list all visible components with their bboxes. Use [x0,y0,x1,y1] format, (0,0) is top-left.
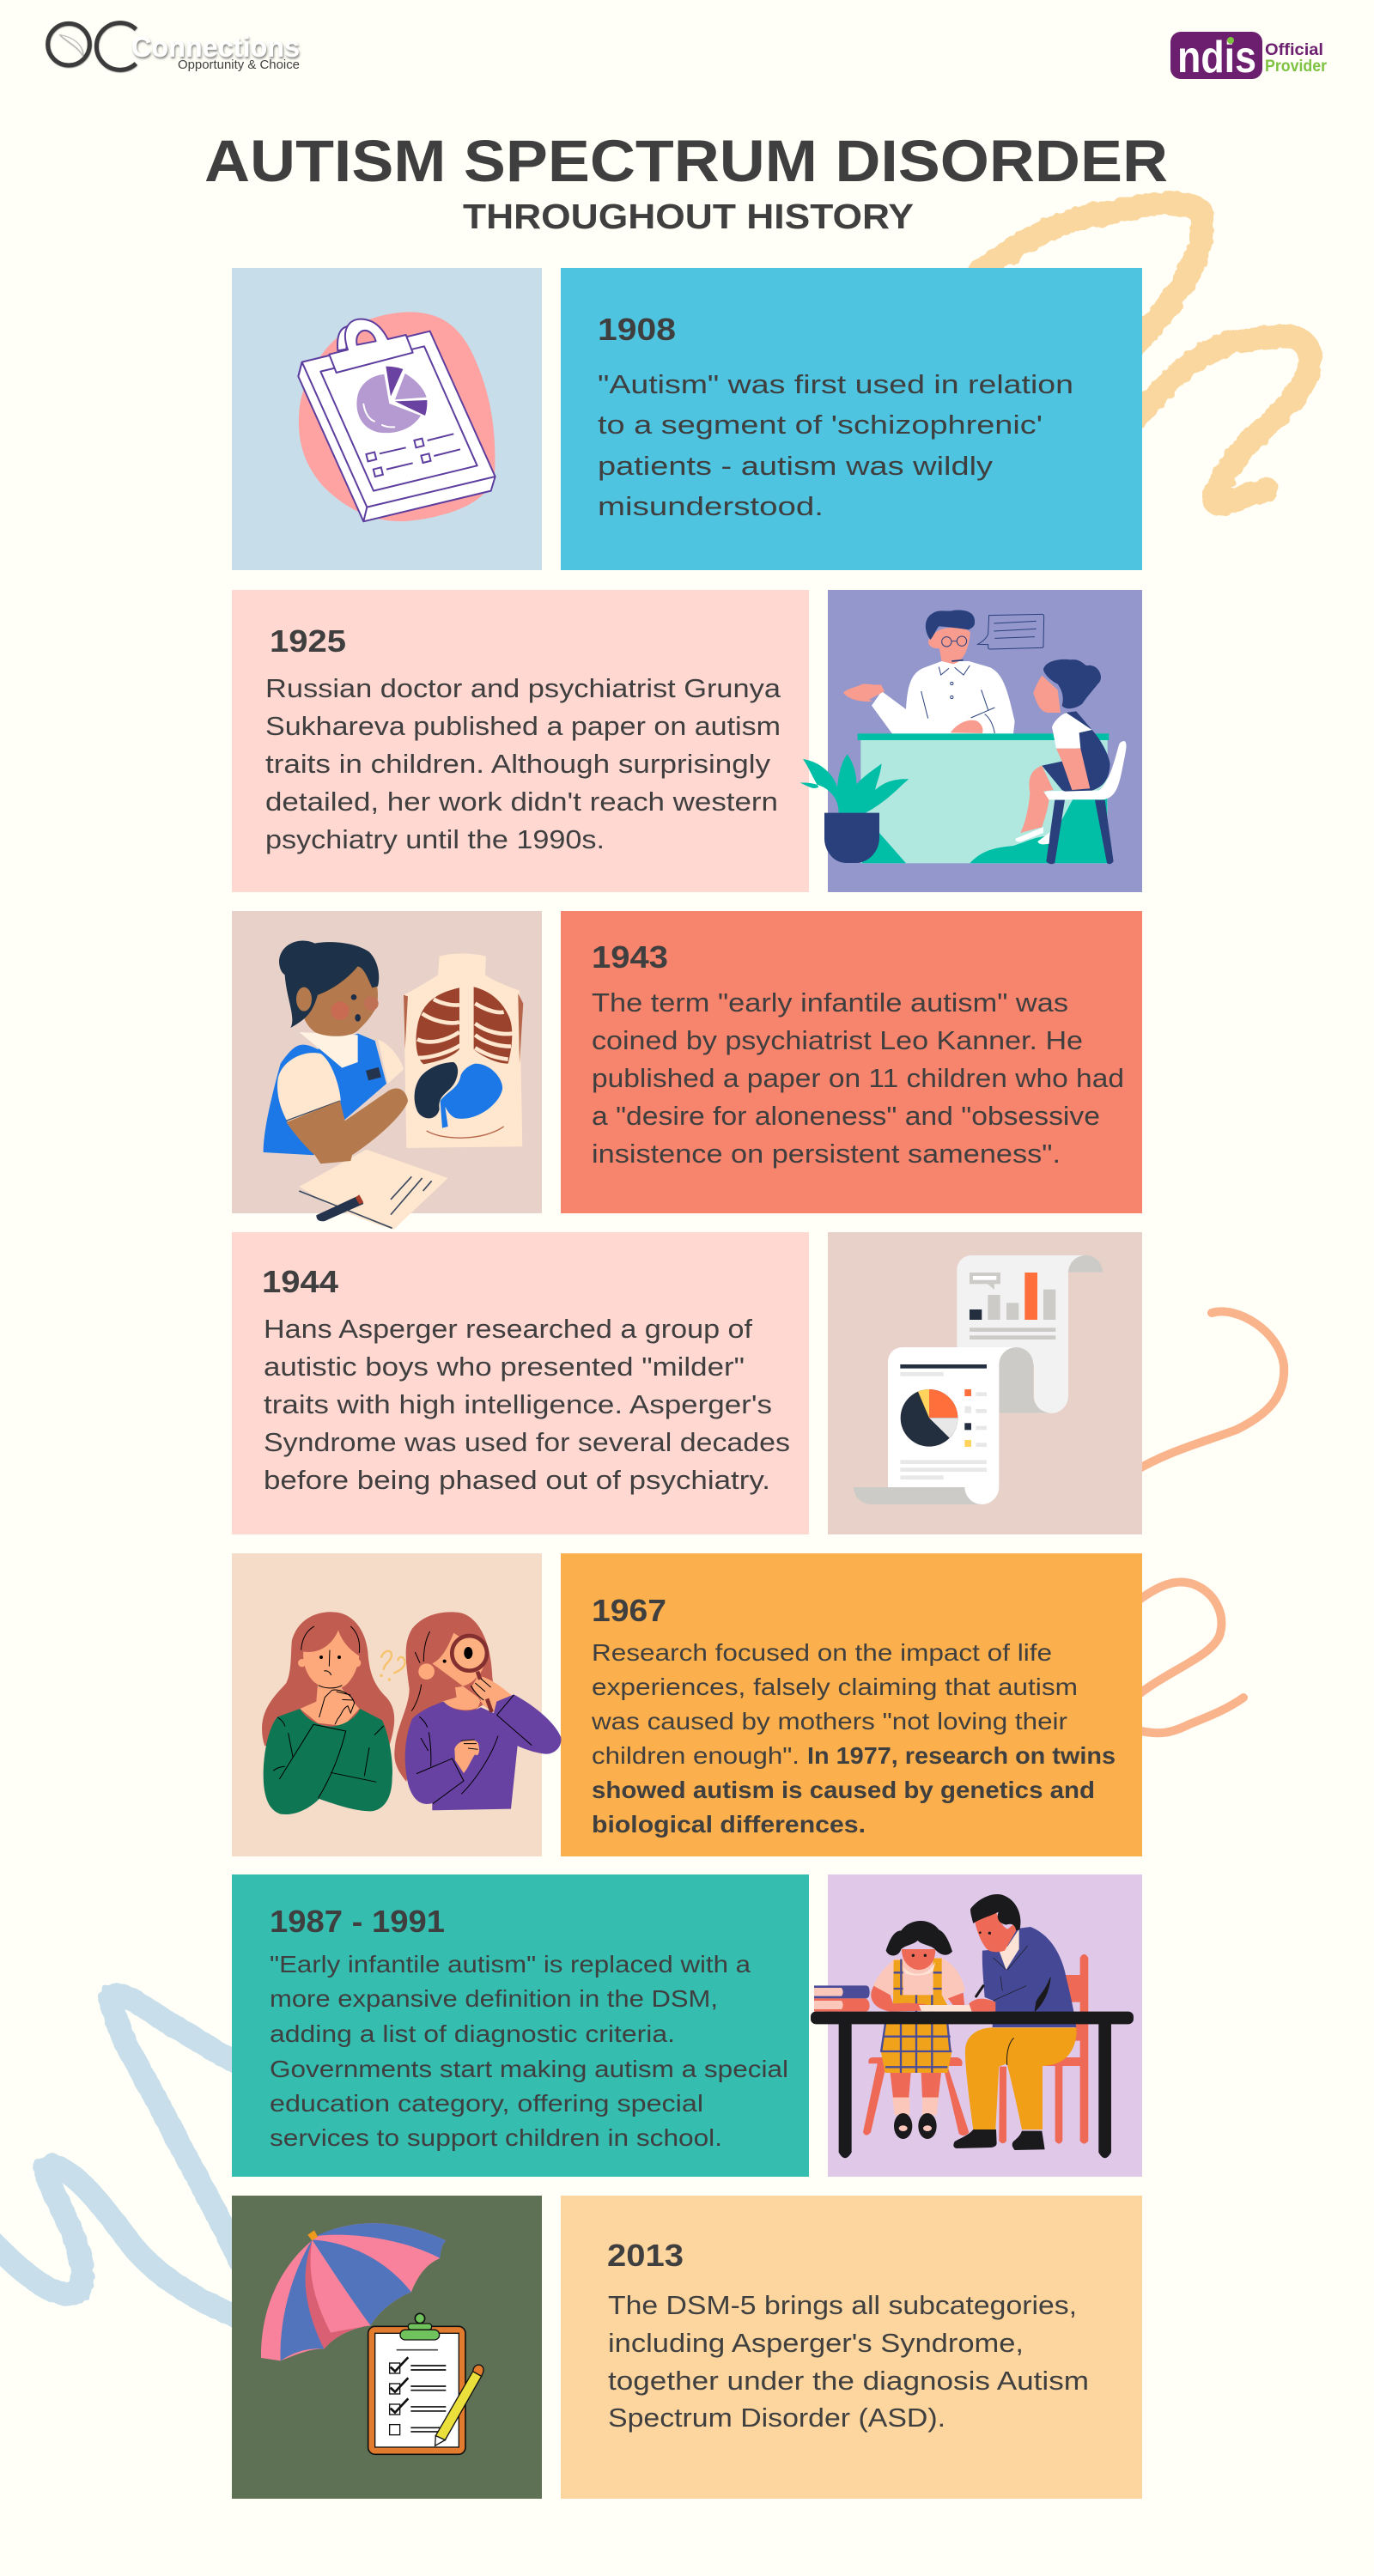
panel: 1943 text: published a paper on 11 children who had [592,1063,1124,1093]
panel: 1908 image [232,268,542,570]
logo: NDIS official provider: Official [1265,41,1323,59]
panel: 1943 text: The term "early infantile autism" was [592,987,1068,1018]
panel: 1944 text: autistic boys who presented "milder" [264,1352,745,1382]
illustration: report documents [854,1255,1103,1504]
logo: Connections [48,23,300,72]
panel: 1943 text: 1943 [592,939,668,975]
panel: 1944 text: traits with high intelligence. Asperger's [264,1389,772,1419]
panel: 2013 text: together under the diagnosis Autism [608,2366,1089,2396]
plant [800,754,909,814]
panel: 1967 text: In 1977, research on twins [807,1742,1116,1769]
decorative squiggle: orange top right [970,204,1310,504]
panel: 1943 text: a "desire for aloneness" and "obsessive [592,1101,1100,1131]
panel: 1925 text: Sukhareva published a paper on autism [265,711,781,741]
logo: NDIS official provider [1170,32,1328,82]
panel: 1943 image [232,911,542,1230]
illustration: teacher and girl at table [811,1894,1134,2158]
panel: 1967 text: was caused by mothers "not loving their [591,1708,1067,1735]
panel: 1943 text: insistence on persistent sameness". [592,1139,1061,1169]
panel: 1944 text [232,1232,809,1534]
illustration: doctor and child at desk [800,611,1126,864]
panel: 2013 text: including Asperger's Syndrome, [608,2328,1024,2358]
panel: 1943 text [561,911,1142,1213]
panel: 1987-1991 text [232,1874,809,2177]
panel: 1908 text: "Autism" was first used in relation [598,369,1073,399]
panel: 1987-1991 text: services to support children in school. [270,2124,722,2151]
panel: 1987-1991 text: education category, offering special [270,2090,703,2117]
logo: NDIS official provider: Provider [1265,58,1328,76]
panel: 1908 text: misunderstood. [598,491,824,521]
panel: 1987-1991 text: 1987 - 1991 [270,1904,445,1939]
illustration: umbrella and checklist clipboard [261,2223,483,2454]
panel: 1944 text: Syndrome was used for several decades [264,1427,790,1457]
panel: 1908 text [561,268,1142,570]
illustration: woman with anatomy model [264,940,523,1230]
panel: 2013 text: Spectrum Disorder (ASD). [608,2403,945,2433]
panel: 1987-1991 text: more expansive definition in the DSM, [270,1985,718,2012]
panel: 1908 text: to a segment of 'schizophrenic' [598,410,1043,440]
panel: 1908 text: 1908 [598,312,676,347]
panel: 1987-1991 image [828,1874,1142,2177]
panel: 1944 text: 1944 [262,1264,338,1299]
panel: 2013 image [232,2196,542,2499]
logo: Connections: Connections [131,31,300,63]
title: AUTISM SPECTRUM DISORDER [204,128,1168,194]
panel: 1925 image [800,590,1142,892]
panel: 1967 text: Research focused on the impact of life [592,1639,1052,1666]
panel: 1943 text: coined by psychiatrist Leo Kanner. He [592,1025,1083,1055]
panel: 1987-1991 text: "Early infantile autism" is replaced with a [270,1951,751,1978]
panel: 1944 image [828,1232,1142,1534]
panel: 1925 text: traits in children. Although surprisingly [265,749,771,779]
panel: 1944 text: Hans Asperger researched a group of [264,1314,752,1344]
panel: 1925 text: detailed, her work didn't reach western [265,787,778,817]
panel: 1967 text: children enough". [592,1742,799,1769]
panel: 1967 text: showed autism is caused by genetics and [592,1777,1095,1803]
panel: 1925 text: Russian doctor and psychiatrist Grunya [265,673,781,703]
panel: 2013 text [561,2196,1142,2499]
panel: 1908 text: patients - autism was wildly [598,451,994,481]
panel: 1967 text [561,1553,1142,1856]
panel: 1944 text: before being phased out of psychiatry. [264,1465,770,1495]
panel: 1967 image background [232,1553,542,1856]
panel: 1967 text: experiences, falsely claiming that autism [592,1674,1078,1700]
icon: clipboard with pie chart [298,312,495,521]
panel: 1967 text: biological differences. [592,1811,866,1838]
panel: 2013 text: 2013 [607,2238,684,2273]
panel: 1987-1991 text: adding a list of diagnostic criteria. [270,2020,675,2047]
illustration: two women thinking with magnifier [262,1612,562,1814]
panel: 1925 text: 1925 [270,623,346,659]
decorative squiggle: blue left [0,1995,240,2318]
decorative squiggle: peach right [1134,1311,1284,1733]
logo: NDIS official provider: ndis [1177,33,1256,82]
panel: 1967 text: 1967 [592,1593,666,1628]
panel: 1925 text: psychiatry until the 1990s. [265,824,605,854]
panel: 2013 text: The DSM-5 brings all subcategories, [608,2290,1077,2320]
subtitle: THROUGHOUT HISTORY [463,197,914,236]
panel: 1925 text [232,590,809,892]
logo: Connections: Opportunity & Choice [178,58,300,72]
panel: 1987-1991 text: Governments start making autism a special [270,2056,788,2082]
